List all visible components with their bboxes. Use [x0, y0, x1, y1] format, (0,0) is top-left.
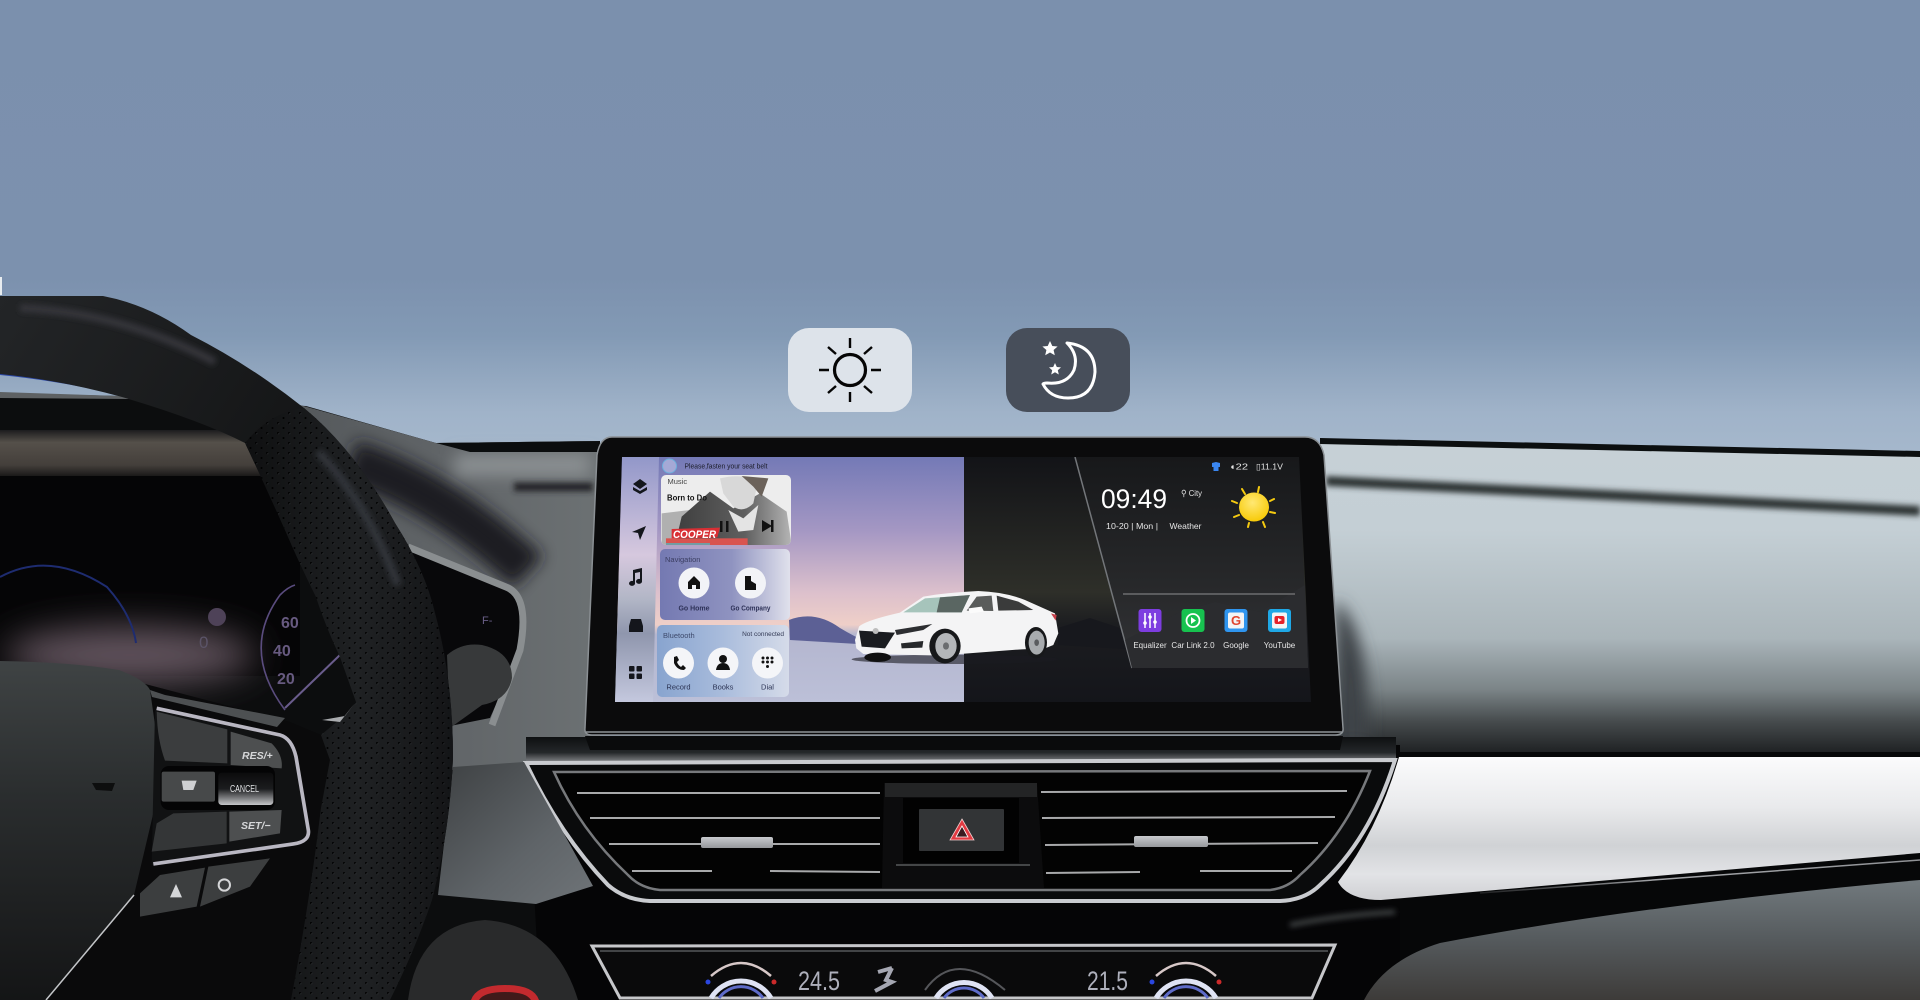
mountains — [789, 616, 856, 644]
right dashboard top surface — [1320, 438, 1920, 760]
app row — [1133, 609, 1296, 650]
screen: day theme half — [610, 456, 966, 704]
navigation card: Navigation — [665, 555, 700, 564]
music card: Born to Do — [667, 492, 707, 502]
icon: phone — [674, 656, 686, 670]
moon mode button — [1006, 328, 1130, 412]
icon: home — [688, 576, 700, 589]
stalk knob — [447, 644, 512, 728]
carbon fibre trim — [438, 762, 593, 904]
steering controls: CANCEL — [230, 784, 259, 795]
wheel rim — [0, 296, 453, 1000]
icon: dial pad — [762, 656, 774, 668]
app: google: G — [1231, 613, 1241, 628]
speedometer gauge — [199, 585, 493, 710]
app: youtube: YouTube — [1264, 641, 1296, 650]
sidebar icons — [629, 479, 647, 679]
steering controls: RES/+ — [242, 750, 273, 762]
app: equalizer: Equalizer — [1133, 641, 1167, 650]
rim wrinkle highlight — [322, 704, 354, 722]
bluetooth card: Bluetooth — [663, 631, 695, 640]
album logo: COOPER — [673, 529, 716, 541]
clock and date: ⚲ City — [1181, 488, 1203, 498]
bluetooth card — [657, 625, 789, 697]
vent tabs — [701, 836, 1208, 848]
bluetooth card: Not connected — [742, 631, 784, 638]
lower right textured panel — [1364, 880, 1920, 1000]
clock and date: Weather — [1170, 521, 1202, 531]
seat belt notice: Please,fasten your seat belt — [684, 464, 768, 470]
icon: weather sun — [1232, 487, 1275, 527]
screen: night theme half — [960, 456, 1315, 704]
head unit bezel — [585, 437, 1343, 750]
icon: company — [745, 576, 756, 590]
night mountains — [1084, 618, 1090, 620]
rim perforated grip — [245, 408, 453, 1000]
hazard button — [882, 783, 1044, 888]
app: car link: Car Link 2.0 — [1171, 641, 1215, 650]
icon: moon and stars — [1042, 341, 1095, 398]
climate control panel: 21.5 — [1087, 966, 1128, 996]
wheel hub and spoke — [0, 661, 345, 1000]
music card — [661, 475, 792, 546]
music card: Music — [668, 477, 687, 486]
climate control panel — [592, 945, 1335, 998]
navigation card — [660, 549, 790, 620]
steering controls — [140, 708, 308, 917]
app: google — [1223, 609, 1249, 650]
car illustration — [852, 591, 1058, 664]
speedometer gauge: 60 — [281, 615, 299, 632]
status bar: ◖22 — [1229, 462, 1248, 472]
speedometer gauge: 40 — [273, 643, 291, 660]
sky background — [0, 0, 1920, 480]
steering wheel — [0, 296, 453, 1000]
speedometer gauge: 0 — [199, 633, 208, 652]
app: youtube — [1264, 609, 1296, 650]
clock and date: 09:49 — [1101, 484, 1167, 514]
app: equalizer — [1133, 609, 1167, 650]
status bar — [1212, 462, 1283, 471]
sidebar — [615, 457, 659, 702]
steering controls: SET/− — [241, 820, 270, 832]
temperature readouts: 24.5 — [798, 966, 840, 996]
widget panel — [1116, 606, 1268, 640]
status bar: ▯11.1V — [1256, 462, 1283, 472]
icon: contacts — [716, 655, 730, 670]
lower dark base behind right trim — [1300, 752, 1920, 1000]
vent slats — [577, 791, 1347, 873]
lower left console with start button — [408, 920, 578, 1000]
central vent surround — [526, 737, 1400, 1000]
navigation card: Go Home — [678, 606, 710, 612]
speedometer gauge: F- — [482, 615, 493, 627]
sun mode button — [788, 328, 912, 412]
blue edge light under rim — [0, 374, 115, 393]
panel mountains — [1125, 612, 1306, 668]
airflow icon — [875, 968, 892, 991]
playback controls — [720, 520, 774, 532]
clock and date: 10-20 | Mon | — [1106, 521, 1158, 531]
speedometer gauge: 20 — [277, 671, 295, 688]
icon: sun — [819, 338, 881, 402]
right chrome trim panel — [1290, 757, 1920, 925]
navigation card: Go Company — [730, 606, 771, 612]
bluetooth card: Books — [713, 682, 734, 692]
app: google: Google — [1223, 641, 1249, 650]
climate dials — [711, 963, 1216, 998]
bluetooth card: Record — [666, 682, 691, 692]
clock and date — [1102, 489, 1202, 530]
app: car link — [1171, 609, 1215, 650]
bluetooth card: Dial — [761, 682, 774, 692]
seat belt notice — [662, 459, 768, 473]
left dashboard and instrument cluster — [0, 392, 600, 1000]
